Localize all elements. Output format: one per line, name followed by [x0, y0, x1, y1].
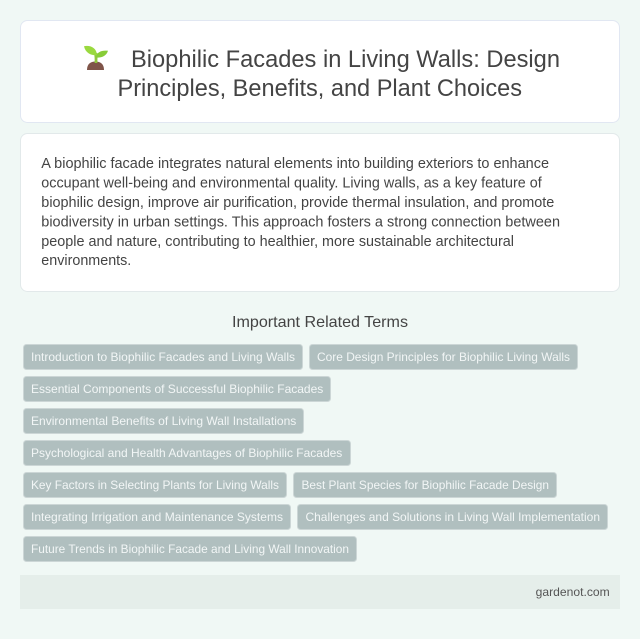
- chip: environmental benefits: Environmental Benefits of Living Wall Installations: [31, 414, 296, 428]
- description text: people and nature, contributing to healthier, more sustainable architectural: [41, 234, 514, 250]
- chip: psychological: [24, 440, 350, 466]
- description text: environments.: [41, 253, 131, 269]
- chip: best plant species: [294, 472, 556, 498]
- icon: sprout: [84, 46, 108, 70]
- description text: biodiversity in urban settings. This approach fosters a strong connection between: [41, 214, 560, 230]
- chip: essential components: [24, 376, 330, 402]
- chip: introduction: Introduction to Biophilic Facades and Living Walls: [31, 350, 295, 364]
- chip: irrigation: Integrating Irrigation and Maintenance Systems: [31, 510, 283, 524]
- chip: core design: Core Design Principles for Biophilic Living Walls: [317, 350, 570, 364]
- panel: related term chips: [24, 344, 608, 562]
- chip: environmental benefits: [24, 408, 304, 434]
- title text: [118, 46, 560, 102]
- chip: key factors: Key Factors in Selecting Plants for Living Walls: [31, 478, 279, 492]
- description text: [41, 156, 560, 269]
- chip: future trends: Future Trends in Biophilic Facade and Living Wall Innovation: [31, 542, 349, 556]
- chip: best plant species: Best Plant Species for Biophilic Facade Design: [302, 478, 549, 492]
- panel: title card: [20, 20, 620, 122]
- title text: Principles, Benefits, and Plant Choices: [118, 75, 522, 102]
- description text: biophilic design, improve air purification, provide thermal insulation, and promote: [41, 195, 554, 211]
- chip: psychological: Psychological and Health Advantages of Biophilic Facades: [31, 446, 342, 460]
- description text: A biophilic facade integrates natural elements into building exteriors to enhance: [41, 156, 549, 172]
- chip: irrigation: [24, 504, 290, 530]
- description text: occupant well-being and environmental quality. Living walls, as a key feature of: [41, 176, 543, 192]
- title text: Biophilic Facades in Living Walls: Design: [131, 46, 560, 73]
- chip: core design: [310, 344, 578, 370]
- footer: [20, 575, 620, 609]
- chip: introduction: [24, 344, 302, 370]
- panel: description card: [20, 134, 620, 292]
- chip: key factors: [24, 472, 286, 498]
- chip: future trends: [24, 536, 356, 562]
- heading: important related terms: Important Related Terms: [232, 314, 408, 331]
- chip: essential components: Essential Components of Successful Biophilic Facades: [31, 382, 323, 396]
- chip: challenges: Challenges and Solutions in Living Wall Implementation: [306, 510, 600, 524]
- chip: challenges: [298, 504, 608, 530]
- footer: gardenot.com: [536, 585, 610, 599]
